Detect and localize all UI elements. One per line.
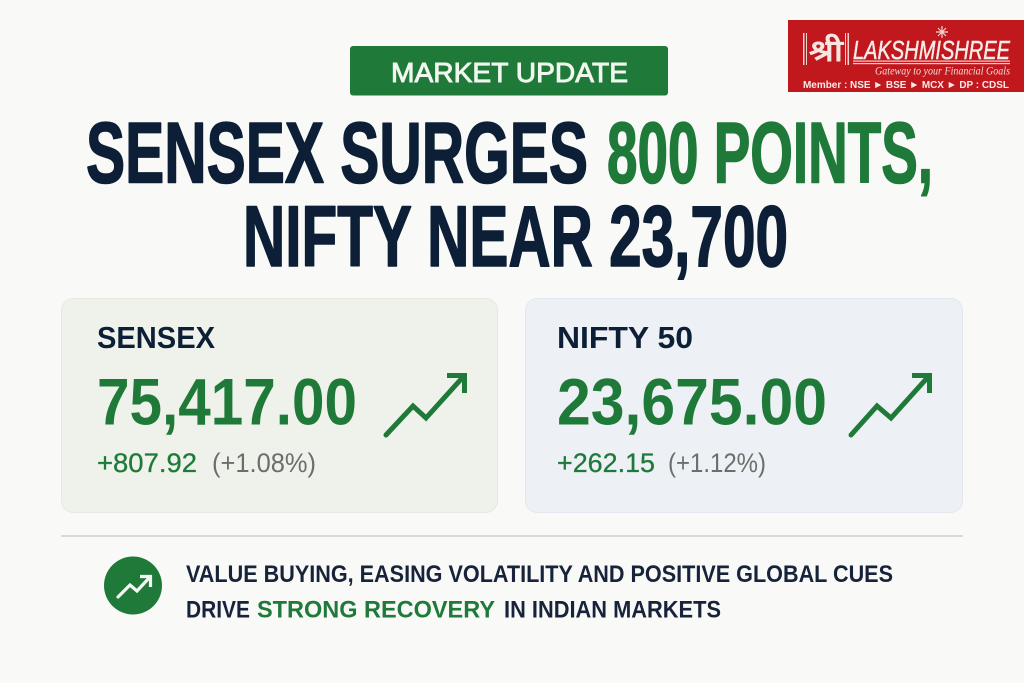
icon: nifty trend arrow [851, 376, 930, 435]
panel: nifty 50 [526, 298, 962, 512]
badge: market update: MARKET UPDATE [391, 57, 628, 88]
summary text [186, 561, 893, 624]
icon: trend circle [104, 556, 162, 614]
badge: market update [350, 46, 668, 96]
summary text: STRONG RECOVERY [257, 596, 495, 624]
summary text: IN INDIAN MARKETS [504, 596, 721, 624]
nifty value: 23,675.00 [557, 364, 827, 438]
logo: Lakshmishree: श्री [809, 33, 844, 68]
nifty change: +262.15 [557, 448, 655, 478]
sensex label: SENSEX [97, 320, 215, 355]
sensex value: 75,417.00 [97, 364, 357, 438]
sensex percent: (+1.08%) [212, 448, 316, 478]
panel: sensex [62, 298, 498, 512]
nifty label: NIFTY 50 [557, 320, 693, 355]
title: SENSEX SURGES [86, 106, 588, 202]
logo: Lakshmishree [788, 20, 1024, 92]
nifty percent: (+1.12%) [668, 448, 766, 478]
title [86, 106, 933, 285]
icon: sensex trend arrow [386, 376, 464, 435]
sensex change: +807.92 [97, 448, 197, 478]
logo: Lakshmishree: Member : NSE ► BSE ► MCX ► DP : CDSL [803, 79, 1010, 91]
summary text: DRIVE [186, 596, 250, 624]
summary text: VALUE BUYING, EASING VOLATILITY AND POSITIVE GLOBAL CUES [186, 561, 893, 588]
